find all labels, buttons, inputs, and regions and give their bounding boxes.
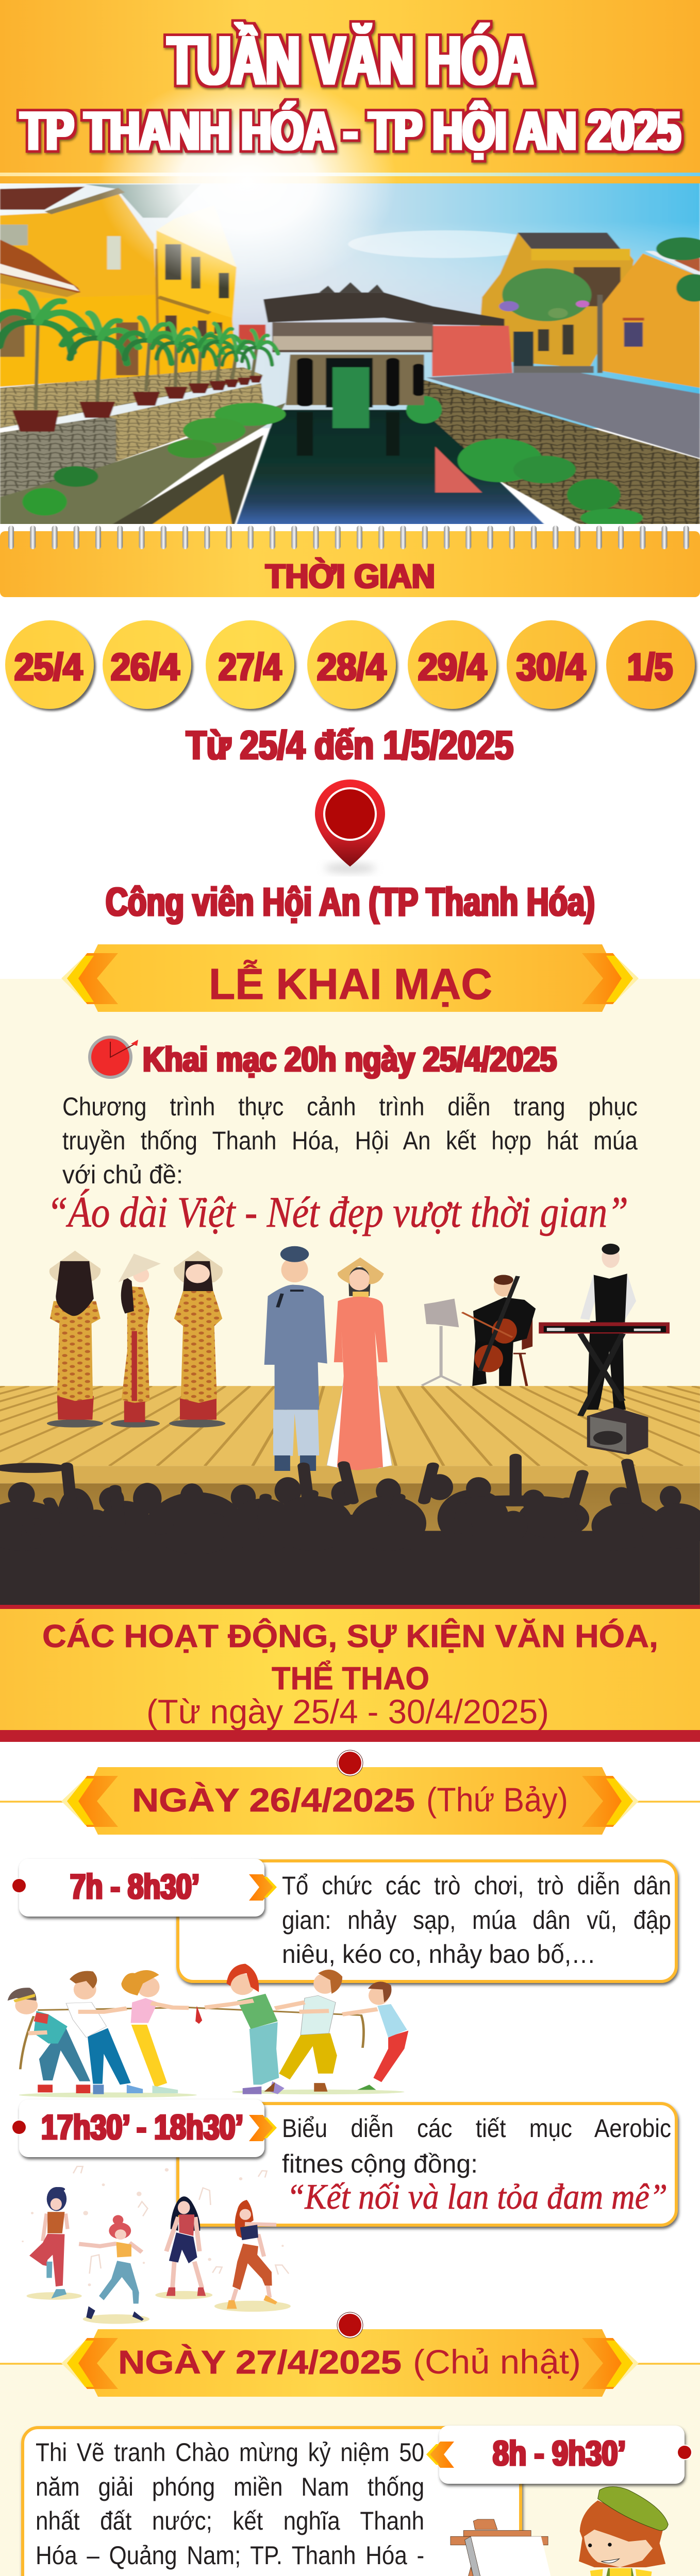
- banner: Lễ khai mạc: LỄ KHAI MẠC: [209, 960, 492, 1008]
- title: [21, 22, 680, 161]
- illustration: girl painter with easel: [433, 2487, 668, 2576]
- amplifier: [587, 1407, 648, 1455]
- woman in coral ao dai: [327, 1258, 392, 1470]
- icon: clock: [88, 1036, 138, 1079]
- text block: painting contest: năm giải phóng miền Nam thống: [36, 2472, 424, 2501]
- date circles: 26/4: [111, 646, 179, 688]
- opening paragraph last line: với chủ đề:: [62, 1160, 183, 1189]
- stage scene with performers and crowd: [0, 1244, 700, 1606]
- section header: các hoạt động: (Từ ngày 25/4 - 30/4/2025): [146, 1692, 549, 1731]
- dancer 4: [227, 2200, 277, 2309]
- text block: painting contest: Hóa – Quảng Nam; TP. Thanh Hóa -: [36, 2541, 424, 2570]
- date circles: 1/5: [627, 646, 673, 688]
- activity text last line: niêu, kéo co, nhảy bao bố,…: [282, 1940, 596, 1969]
- panel: 7h activity box: [178, 1861, 676, 1981]
- keyboard player: [539, 1244, 670, 1416]
- panel: thời gian calendar header: THỜI GIAN: [265, 557, 435, 595]
- aerobic text line: fitnes cộng đồng:: [282, 2149, 478, 2178]
- illustration: aerobic dancers: [22, 2166, 291, 2324]
- title: TUẦN VĂN HÓA: [168, 22, 533, 99]
- illustration: tug of war: [8, 1964, 408, 2097]
- text block: 7h folk games: [282, 1871, 671, 1935]
- time pill: 8h - 9h30: [426, 2426, 692, 2484]
- aerobic slogan: “Kết nối và lan tỏa đam mê”: [287, 2177, 668, 2217]
- background: cream zone opening: [0, 979, 700, 1605]
- dancer 3: [166, 2196, 206, 2296]
- date circles: 28/4: [317, 646, 386, 688]
- painter girl: [579, 2487, 668, 2576]
- cellist: [462, 1275, 536, 1386]
- date circles: 25/4: [14, 646, 82, 688]
- child 6: [342, 1981, 408, 2090]
- music stand: [422, 1299, 461, 1385]
- section header: các hoạt động: [0, 1605, 700, 1742]
- banner: ngày 26/4/2025: (Thứ Bảy): [426, 1781, 568, 1819]
- banner: ngày 27/4/2025: NGÀY 27/4/2025: [118, 2344, 402, 2381]
- date circles: 30/4: [516, 646, 586, 688]
- section header: các hoạt động: THỂ THAO: [272, 1661, 429, 1697]
- text block: painting contest: nhất đất nước; kết nghĩa Thanh: [36, 2506, 424, 2535]
- text block: aerobic: Biểu diễn các tiết mục Aerobic: [282, 2114, 671, 2143]
- time pill: 8h - 9h30: 8h - 9h30’: [493, 2434, 626, 2473]
- child 1: [8, 1988, 90, 2093]
- date circles: 27/4: [219, 646, 281, 688]
- banner: ngày 27/4/2025: [61, 2312, 639, 2397]
- panel: aerobic activity box: [178, 2104, 676, 2225]
- dancer 1: [29, 2187, 68, 2298]
- hero photo: Japanese bridge in Hoi An: [0, 175, 700, 527]
- child 5: [264, 1970, 342, 2092]
- dancer girl side view: [111, 1253, 161, 1428]
- text block: opening programme: Chương trình thực cảnh trình diễn trang phục: [62, 1092, 638, 1121]
- panel: thời gian calendar header: [0, 526, 700, 597]
- divider lines: [0, 1802, 700, 2576]
- text block: opening programme: [62, 1092, 638, 1155]
- sun glow: [98, 73, 397, 290]
- banner: ngày 27/4/2025: (Chủ nhật): [413, 2343, 581, 2381]
- date circles: 29/4: [418, 646, 487, 688]
- banner: ngày 26/4/2025: NGÀY 26/4/2025: [132, 1782, 415, 1819]
- child 3: [121, 1970, 189, 2093]
- section header: các hoạt động: CÁC HOẠT ĐỘNG, SỰ KIỆN VĂN HÓA,: [42, 1619, 658, 1654]
- dancer girl back view: [47, 1251, 103, 1428]
- child 2: [66, 1971, 143, 2094]
- date circles: [5, 620, 695, 709]
- easel: [433, 2519, 588, 2576]
- background: cream zone 27/4: [0, 2364, 700, 2576]
- dancer 2: [79, 2215, 144, 2321]
- text block: 7h folk games: gian: nhảy sạp, múa dân vũ, đập: [282, 1906, 671, 1935]
- panel: painting contest box: [23, 2428, 521, 2576]
- banner: Lễ khai mạc: [61, 944, 639, 1012]
- time pill: 7h - 8h30: [11, 1859, 277, 1917]
- child 4: [205, 1964, 285, 2094]
- text block: opening programme: truyền thống Thanh Hóa, Hội An kết hợp hát múa: [62, 1126, 638, 1155]
- time pill: 17h30 - 18h30: 17h30’ - 18h30’: [41, 2108, 243, 2147]
- text block: painting contest: Thi Vẽ tranh Chào mừng kỷ niệm 50: [36, 2438, 424, 2467]
- date range text: Từ 25/4 đến 1/5/2025: [186, 722, 513, 768]
- header band: [0, 0, 700, 183]
- opening time text: Khai mạc 20h ngày 25/4/2025: [143, 1040, 557, 1079]
- time pill: 17h30 - 18h30: [11, 2099, 277, 2157]
- stage floor: [0, 1386, 700, 1606]
- text block: 7h folk games: Tổ chức các trò chơi, trò diễn dân: [282, 1871, 671, 1900]
- text block: painting contest: [36, 2438, 424, 2576]
- crowd silhouette: [0, 1457, 700, 1606]
- icon: location pin: [315, 779, 385, 873]
- banner: ngày 26/4/2025: [61, 1750, 639, 1835]
- dancer girl front view: [169, 1251, 225, 1428]
- time pill: 7h - 8h30: 7h - 8h30’: [70, 1867, 199, 1906]
- man in blue ao dai: [264, 1246, 327, 1471]
